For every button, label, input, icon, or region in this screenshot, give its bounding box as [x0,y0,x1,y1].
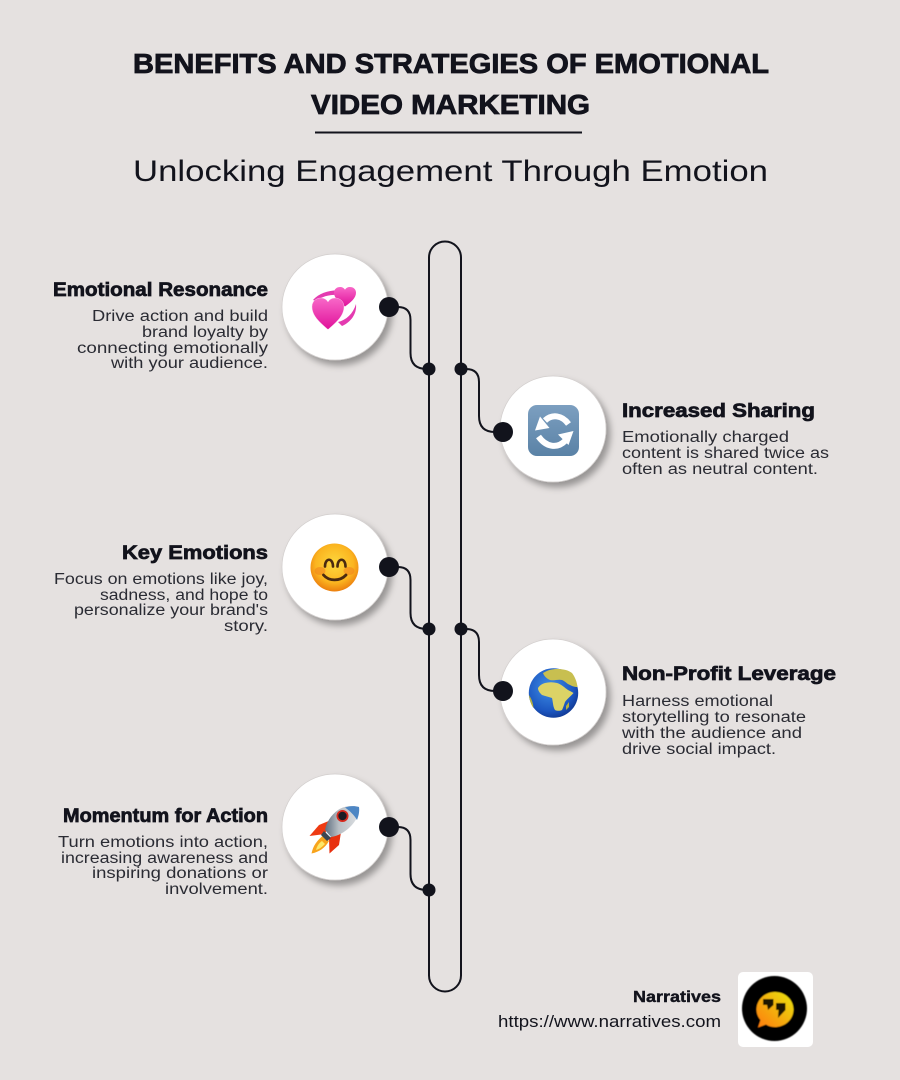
anchor dot: emotional resonance [379,297,399,317]
connector: momentum for action [389,827,429,890]
anchor dot: increased sharing [493,422,513,442]
panel: momentum for action [58,774,436,898]
connector: key emotions [389,567,429,629]
description: emotional resonance: brand loyalty by [142,324,268,341]
track dot: increased sharing [454,362,468,376]
panel: key emotions [54,514,436,636]
icon: globe [529,668,578,718]
heading: emotional resonance: Emotional Resonance [53,280,268,301]
heading: non-profit leverage: Non-Profit Leverage [622,664,836,685]
track dot: non-profit leverage [454,622,468,636]
title [133,48,769,120]
icon: brand logo [738,972,813,1047]
description: momentum for action: Turn emotions into action, [58,834,268,851]
circle: momentum for action [282,774,388,880]
track dot: momentum for action [422,884,436,896]
description: increased sharing: Emotionally charged [622,429,789,446]
title underline [315,132,582,134]
brand name: Narratives [633,989,721,1006]
description: emotional resonance: Drive action and build [92,308,268,325]
description: momentum for action [58,834,268,898]
timeline track [429,242,461,992]
circle: key emotions [282,514,388,620]
description: non-profit leverage: storytelling to resonate [622,709,806,726]
brand url: https://www.narratives.com [498,1012,721,1031]
description: momentum for action: inspiring donations or [92,865,268,882]
description: momentum for action: increasing awareness and [61,850,268,867]
track dot: key emotions [422,622,436,636]
connector: non-profit leverage [461,629,503,691]
icon: revolving hearts [312,287,356,330]
description: non-profit leverage [621,693,806,758]
connector: emotional resonance [389,307,429,369]
footer brand [498,989,721,1031]
description: key emotions: Focus on emotions like joy, [54,571,268,588]
description: emotional resonance [77,308,268,372]
icon: smiling face [310,544,358,592]
heading: increased sharing: Increased Sharing [622,401,815,422]
heading: momentum for action: Momentum for Action [63,806,268,827]
title: BENEFITS AND STRATEGIES OF EMOTIONAL [133,48,769,79]
description: key emotions [54,571,268,635]
track dot: emotional resonance [422,362,436,376]
circle: non-profit leverage [500,639,606,745]
panel: non-profit leverage [454,622,836,758]
anchor dot: key emotions [379,557,399,577]
anchor dot: momentum for action [379,817,399,837]
panel: increased sharing [454,362,829,482]
icon: refresh arrows [528,405,579,456]
description: non-profit leverage: with the audience and [621,725,802,742]
icon: rocket [310,806,359,854]
subtitle: Unlocking Engagement Through Emotion [133,155,768,188]
title: VIDEO MARKETING [311,89,590,120]
description: non-profit leverage: drive social impact. [622,741,776,758]
description: key emotions: story. [224,618,268,635]
description: increased sharing: often as neutral content. [622,461,818,478]
circle: increased sharing [500,376,606,482]
description: increased sharing: content is shared twice as [622,445,829,462]
panel: emotional resonance [53,254,436,376]
circle: emotional resonance [282,254,388,360]
description: emotional resonance: with your audience. [110,355,268,372]
description: momentum for action: involvement. [165,881,268,898]
connector: increased sharing [461,369,503,432]
description: key emotions: personalize your brand's [74,602,268,619]
description: increased sharing [622,429,829,478]
heading: key emotions: Key Emotions [122,543,268,564]
description: key emotions: sadness, and hope to [100,587,268,604]
description: non-profit leverage: Harness emotional [622,693,773,710]
description: emotional resonance: connecting emotionally [77,340,268,357]
anchor dot: non-profit leverage [493,681,513,701]
